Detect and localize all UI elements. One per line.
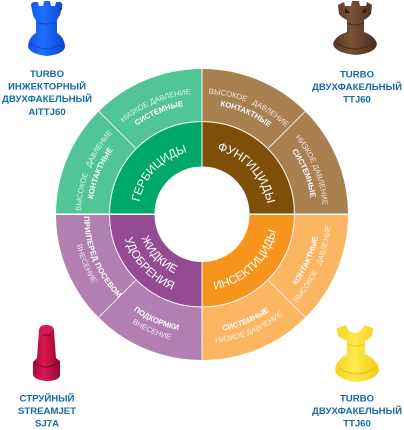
heading: fungicides: ФУНГИЦИДЫ xyxy=(218,143,276,203)
label: AITTJ60 nozzle: TURBO xyxy=(30,69,65,80)
label: herbicide low pressure systemic: НИЗКОЕ ДАВЛЕНИЕ xyxy=(120,88,190,122)
label: top dressing application: ВНЕСЕНИЕ xyxy=(132,318,172,340)
panel: fungicides quadrant xyxy=(202,69,348,214)
label: herbicide high pressure contact: ВЫСОКОЕ ДАВЛЕНИЕ xyxy=(76,130,112,210)
panel: insecticides quadrant xyxy=(202,215,348,360)
label: fungicide low pressure systemic: НИЗКОЕ ДАВЛЕНИЕ xyxy=(296,134,328,205)
label: insecticide systemic low pressure: СИСТЕМНЫЕ xyxy=(222,307,270,330)
label: insecticide systemic low pressure: НИЗКОЕ ДАВЛЕНИЕ xyxy=(216,310,283,343)
heading: insecticides: ИНСЕКТИЦИДЫ xyxy=(214,230,276,290)
heading: liquid fertilizers: ЖИДКИЕ xyxy=(141,234,178,274)
label: pre-sowing application: ВНЕСЕНИЕ xyxy=(76,244,98,284)
icon: brown nozzle xyxy=(333,1,377,55)
label: top dressing application: ПОДКОРМКИ xyxy=(134,306,179,330)
label: fungicide high pressure contact: ВЫСОКОЕ ДАВЛЕНИЕ xyxy=(209,88,289,127)
label: yellow TTJ60 nozzle: TURBO xyxy=(340,394,375,404)
label: fungicide high pressure contact: КОНТАКТНЫЕ xyxy=(220,100,272,128)
label: yellow TTJ60 nozzle: ДВУХФАКЕЛЬНЫЙ xyxy=(312,405,402,417)
label: SJ7A nozzle: СТРУЙНЫЙ xyxy=(20,392,75,404)
label: AITTJ60 nozzle: AITTJ60 xyxy=(28,107,66,118)
label: insecticide contact high pressure: КОНТАКТНЫЕ xyxy=(292,236,318,286)
label: pre-sowing application: ПРИ/ПЕРЕД ПОСЕВОМ xyxy=(84,216,122,298)
label: fungicide low pressure systemic: СИСТЕМНЫЕ xyxy=(292,149,316,198)
label: brown TTJ60 nozzle: ДВУХФАКЕЛЬНЫЙ xyxy=(312,81,402,93)
label: herbicide low pressure systemic: СИСТЕМНЫЕ xyxy=(135,100,184,125)
label: SJ7A nozzle: STREAMJET xyxy=(18,406,76,417)
label: SJ7A nozzle: SJ7A xyxy=(35,418,59,430)
label: AITTJ60 nozzle: ИНЖЕКТОРНЫЙ xyxy=(8,80,86,92)
wheel chart xyxy=(56,69,348,360)
label: brown TTJ60 nozzle: TTJ60 xyxy=(343,94,371,106)
panel: liquid fertilizers quadrant xyxy=(56,215,202,360)
icon: yellow nozzle xyxy=(335,325,379,382)
icon: red nozzle xyxy=(33,325,60,381)
label: AITTJ60 nozzle: ДВУХФАКЕЛЬНЫЙ xyxy=(2,93,92,105)
icon: blue nozzle xyxy=(28,1,65,56)
heading: herbicides: ГЕРБИЦИДЫ xyxy=(132,144,186,201)
panel: herbicides quadrant xyxy=(56,69,202,214)
label: brown TTJ60 nozzle: TURBO xyxy=(340,70,375,80)
heading: liquid fertilizers: УДОБРЕНИЯ xyxy=(125,236,175,290)
label: insecticide contact high pressure: ВЫСОКОЕ ДАВЛЕНИЕ xyxy=(292,226,330,302)
label: herbicide high pressure contact: КОНТАКТНЫЕ xyxy=(88,147,113,199)
label: yellow TTJ60 nozzle: TTJ60 xyxy=(343,418,371,430)
